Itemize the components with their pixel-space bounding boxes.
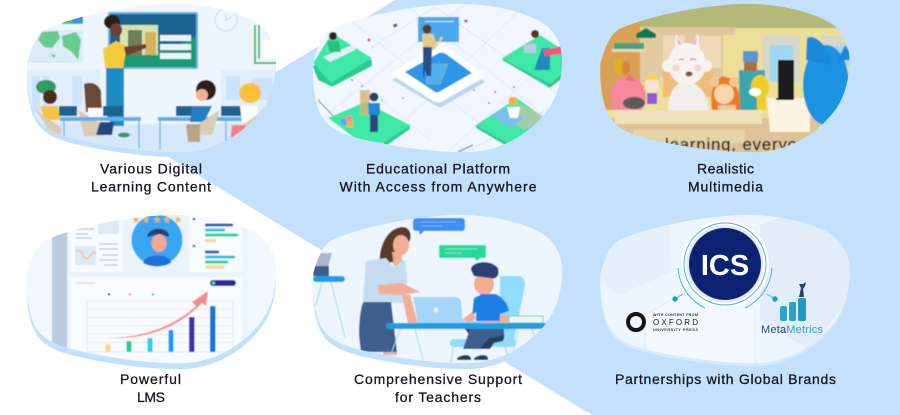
blob shadow [27,9,276,157]
panel: global brand partnerships [600,214,850,366]
heading: powerful LMS: Powerful [120,371,181,387]
logo: MetaMetrics: MetaMetrics [761,324,824,336]
bar chart [106,306,216,352]
panel: teacher support [312,214,562,370]
heading: comprehensive support [354,371,522,405]
panel: educational platform [312,4,562,152]
teacher and student illustration [312,214,562,364]
heading: various digital learning content: Various Digital [100,160,202,176]
platform base [392,77,485,108]
heading: various digital learning content [91,160,211,195]
heading: various digital learning content: Learning Content [91,179,211,195]
arrow: growth [107,291,208,338]
logo: Oxford: OXFORD [653,318,698,327]
heading: powerful LMS: LMS [137,389,165,405]
partner logos [600,214,850,364]
panel: digital learning content [20,0,280,160]
heading: educational platform: With Access from Anywhere [340,179,537,195]
heading: educational platform: Educational Platform [366,160,510,176]
logo: ICS: ICS [701,250,749,282]
heading: comprehensive support: for Teachers [395,389,481,405]
heading: realistic multimedia: Realistic [697,160,754,176]
blob shadow [313,221,562,369]
classroom illustration [27,4,276,152]
dashboard illustration [27,215,276,364]
animated scene [595,0,855,158]
heading: partnerships with global brands: Partnerships with Global Brands [615,371,836,387]
heading: powerful LMS [120,371,181,405]
animated scene: learning, everyon [665,136,807,154]
heading: realistic multimedia [688,160,763,195]
logo: Oxford: UNIVERSITY PRESS [653,328,698,332]
logo: MetaMetrics [761,282,824,336]
profile avatar [132,214,182,266]
green tiles [312,58,373,88]
heading: realistic multimedia: Multimedia [688,179,763,195]
blob shadow [27,221,276,369]
logo: Oxford: WITH CONTENT FROM [653,313,698,317]
panel: powerful LMS [26,215,276,370]
heading: comprehensive support: Comprehensive Support [354,371,522,387]
panel: realistic multimedia [595,0,855,158]
platform illustration [312,4,562,152]
blob base [600,218,850,366]
logo: Oxford [628,313,698,332]
heading: educational platform [340,160,537,195]
